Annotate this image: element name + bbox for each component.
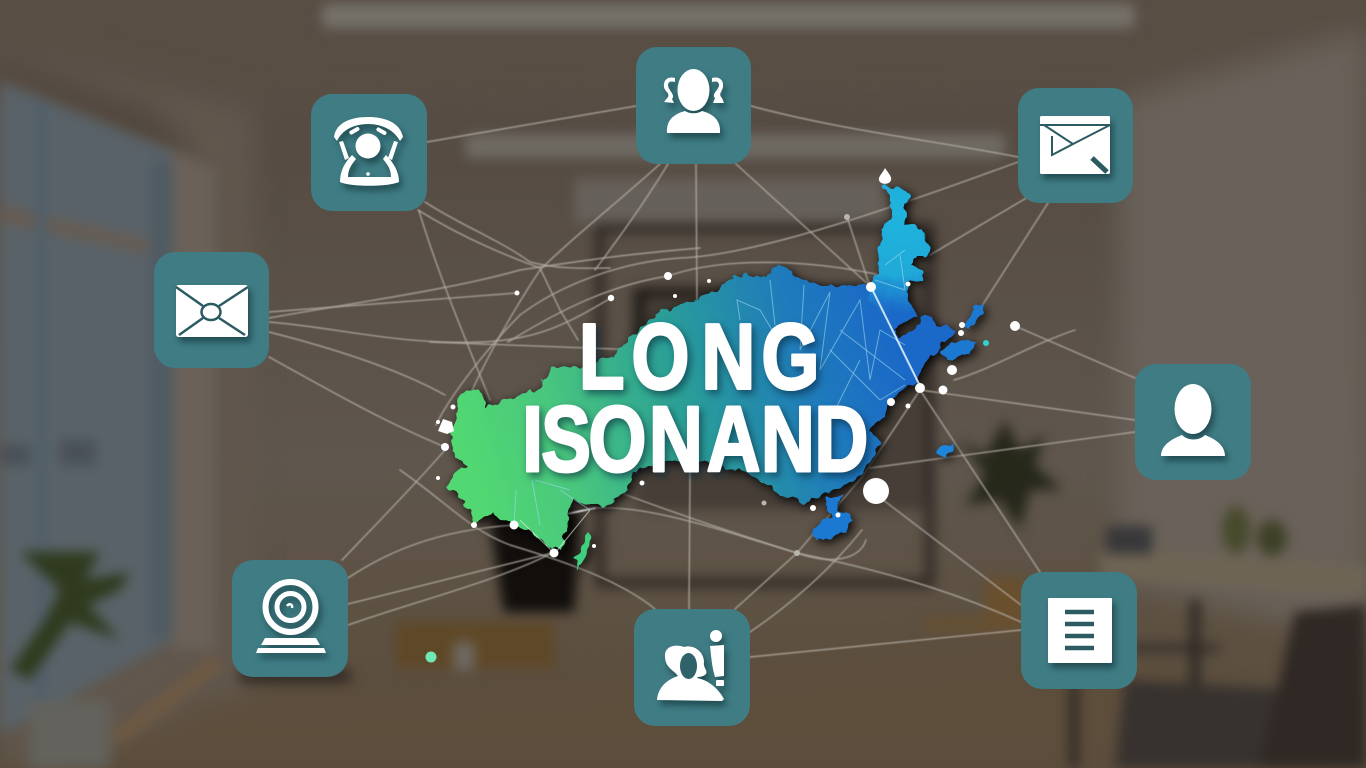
icon: telephone — [334, 117, 403, 186]
icon: user — [1161, 384, 1225, 456]
icon: envelope — [176, 285, 248, 337]
title text: ISONAND — [522, 387, 868, 491]
tile: document — [1021, 572, 1137, 689]
tile: phone — [311, 94, 427, 211]
tile: webcam — [232, 560, 348, 677]
icon: person — [664, 69, 724, 133]
icon: document — [1048, 598, 1112, 663]
accent dot — [426, 652, 436, 662]
map of Long Island — [436, 168, 1020, 568]
tile: envelope — [154, 252, 269, 368]
icon: envelope and pencil — [1040, 116, 1110, 174]
tile: person with headset — [636, 47, 751, 164]
network nodes — [436, 168, 1020, 558]
street lines on the island — [514, 250, 905, 525]
tile: envelope with pencil — [1018, 88, 1133, 203]
tile: person with info mark — [634, 609, 750, 726]
network connection lines — [269, 106, 1135, 657]
tile: user — [1135, 364, 1251, 480]
icon: person with i — [657, 630, 724, 701]
island silhouette — [447, 186, 984, 568]
title text — [522, 305, 868, 491]
icon: webcam — [256, 582, 326, 653]
title text: LONG — [579, 305, 819, 408]
